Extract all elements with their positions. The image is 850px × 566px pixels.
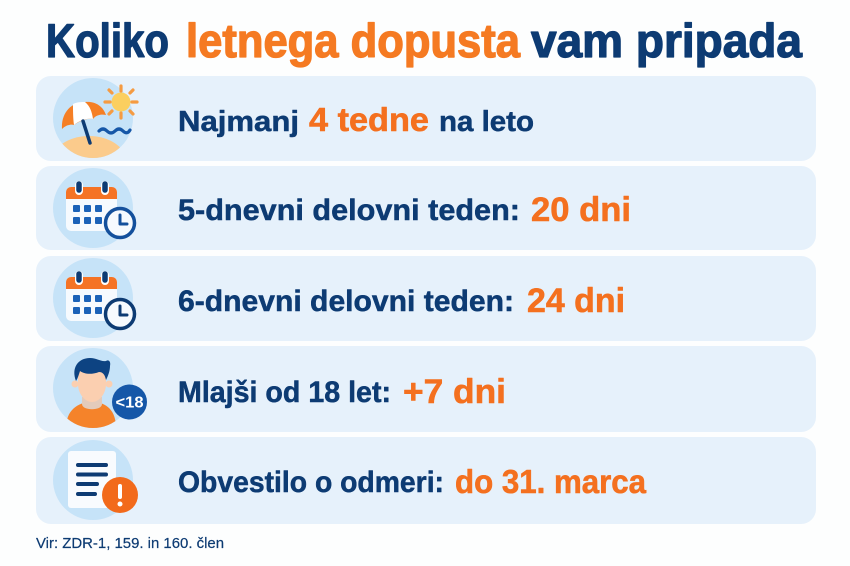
text: notice by March 31: Obvestilo o odmeri:	[178, 466, 444, 499]
panel: under 18	[36, 346, 816, 432]
text: under 18 plus seven days: Mlajši od 18 let:	[178, 376, 391, 409]
title: Koliko	[46, 14, 169, 67]
text: five-day week 20 days	[178, 191, 631, 229]
icon: calendar with clock	[53, 168, 134, 248]
source note: Vir: ZDR-1, 159. in 160. člen	[36, 536, 224, 552]
title: letnega dopusta	[186, 14, 521, 67]
panel: notice deadline	[36, 437, 816, 524]
text: minimum four weeks: Najmanj	[178, 106, 299, 138]
title: vam pripada	[531, 14, 803, 67]
panel: minimum leave	[36, 76, 816, 161]
panel: six-day week	[36, 256, 816, 341]
text: six-day week 24 days	[178, 282, 625, 320]
text: under 18 plus seven days	[178, 373, 506, 411]
text: minimum four weeks: na leto	[439, 106, 534, 138]
text: notice by March 31	[178, 463, 647, 500]
text: under 18 plus seven days: +7 dni	[403, 373, 506, 411]
text: six-day week 24 days: 6-dnevni delovni teden:	[178, 285, 514, 318]
text: minimum four weeks: 4 tedne	[309, 101, 429, 138]
text: six-day week 24 days: 24 dni	[527, 282, 625, 320]
text: five-day week 20 days: 5-dnevni delovni teden:	[178, 194, 520, 227]
panel: five-day week	[36, 166, 816, 250]
icon: beach umbrella and sun	[53, 78, 139, 158]
icon: calendar with dark clock	[53, 258, 134, 338]
text: five-day week 20 days: 20 dni	[531, 191, 631, 229]
icon: young person with under-18 badge	[53, 348, 147, 428]
text: minimum four weeks	[178, 101, 534, 138]
icon: document with warning badge	[53, 440, 138, 520]
icon: young person with under-18 badge: <18	[116, 394, 144, 412]
text: notice by March 31: do 31. marca	[455, 463, 647, 500]
title	[46, 14, 803, 67]
